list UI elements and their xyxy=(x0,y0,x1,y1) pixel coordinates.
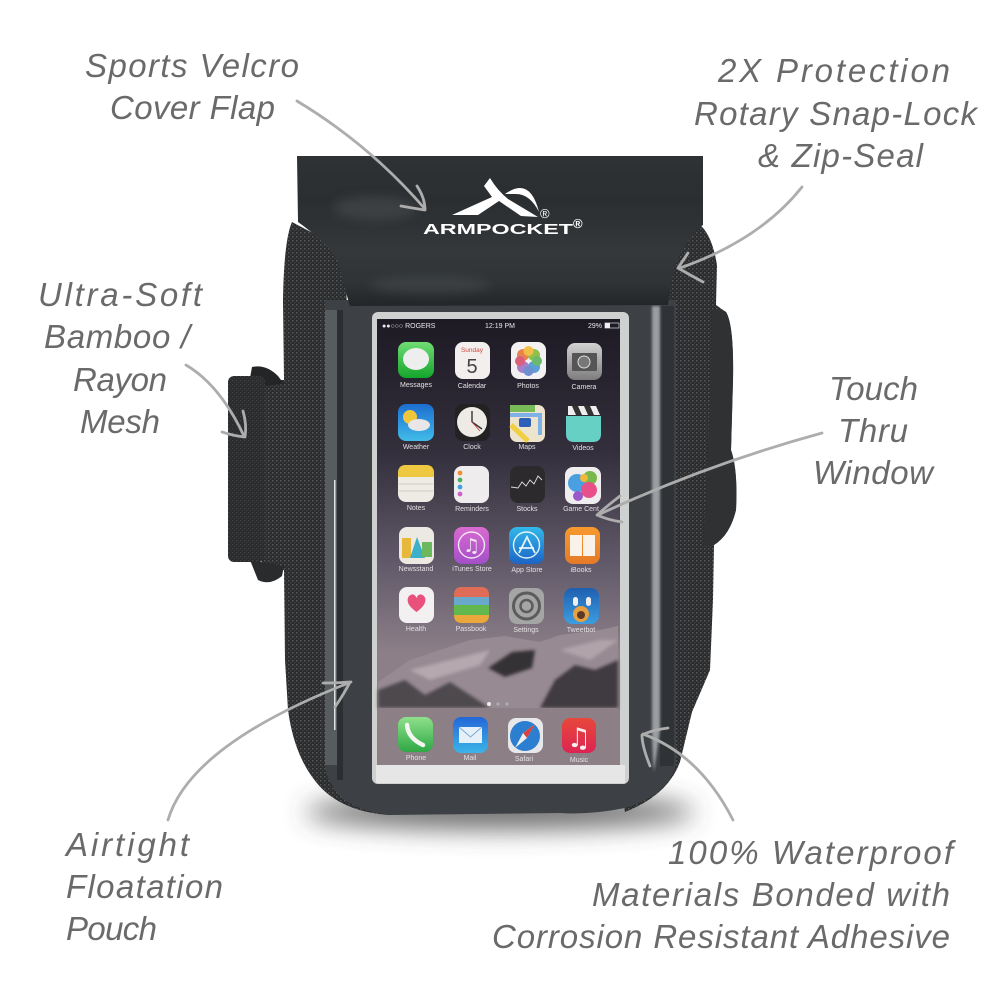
icon: Safari xyxy=(508,718,543,763)
icon: Photos: Photos xyxy=(517,383,539,390)
icon: Maps: Maps xyxy=(518,444,536,451)
icon: Newsstand xyxy=(399,527,434,573)
callout: 100% Waterproof Materials xyxy=(492,834,957,955)
right strap padded bump xyxy=(703,310,736,545)
callout: 2X Protection xyxy=(694,52,978,174)
arrow: velcro flap xyxy=(297,101,425,210)
icon: Reminders: Reminders xyxy=(455,506,489,513)
callout: Airtight Floatation Pouch: Airtight xyxy=(64,826,191,863)
icon: Music: ♫ xyxy=(567,723,591,754)
callout: 100% Waterproof Materials: 100% Waterproof xyxy=(668,834,957,871)
left mesh strap body xyxy=(262,222,390,815)
right side seam xyxy=(652,306,674,772)
icon: Messages: Messages xyxy=(400,382,432,389)
icon: Phone xyxy=(398,717,433,762)
callout: Ultra-Soft Bamboo / Rayon Mesh: Mesh xyxy=(80,403,160,440)
phone screen xyxy=(377,319,620,765)
callout: 2X Protection: 2X Protection xyxy=(717,52,950,89)
icon: Videos xyxy=(566,406,601,452)
callout: Touch Thru Window xyxy=(813,370,935,491)
icon: Mail: Mail xyxy=(464,755,477,762)
callout: Ultra-Soft Bamboo / Rayon Mesh: Ultra-Soft xyxy=(38,276,204,313)
icon: Newsstand: Newsstand xyxy=(399,566,433,573)
left arm strap with buckle xyxy=(228,366,284,582)
arrow: touch thru window xyxy=(597,433,822,522)
status bar: 29% xyxy=(588,323,602,330)
icon: Calendar xyxy=(455,342,490,390)
icon: Stocks xyxy=(510,466,545,513)
left side seam xyxy=(325,310,343,780)
phone window frame xyxy=(372,312,629,784)
arrow: bamboo mesh xyxy=(186,365,246,437)
callout: 100% Waterproof Materials: Corrosion Resistant Adhesive xyxy=(492,918,950,955)
flap highlights xyxy=(333,196,490,294)
callout: Ultra-Soft Bamboo / Rayon Mesh: Bamboo / xyxy=(44,318,193,355)
icon: Reminders xyxy=(454,466,489,513)
callout: Touch Thru Window: Touch xyxy=(829,370,918,407)
icon: iBooks: iBooks xyxy=(570,567,592,574)
icon: Phone: Phone xyxy=(406,755,426,762)
callout: Ultra-Soft Bamboo / Rayon Mesh: Rayon xyxy=(73,361,167,398)
icon: iTunes Store: iTunes Store xyxy=(452,566,492,573)
icon: Stocks: Stocks xyxy=(516,506,538,513)
icon: iBooks xyxy=(565,527,600,574)
icon: Health: Health xyxy=(406,626,426,633)
callout: 100% Waterproof Materials: Materials Bonded with xyxy=(592,876,950,913)
icon: Settings: Settings xyxy=(513,627,539,634)
icon: Camera xyxy=(567,343,602,391)
page dots xyxy=(487,702,509,706)
icon: iTunes Store xyxy=(452,527,492,573)
callout: 2X Protection: Rotary Snap-Lock xyxy=(694,95,978,132)
callout: Airtight Floatation Pouch: Pouch xyxy=(66,910,157,947)
icon: Calendar: Calendar xyxy=(458,383,487,390)
status bar: 12:19 PM xyxy=(485,323,515,330)
callout: Airtight Floatation Pouch: Floatation xyxy=(66,868,223,905)
icon: Messages xyxy=(398,342,434,389)
icon: iTunes Store: ♫ xyxy=(463,535,480,557)
callout: Airtight Floatation Pouch xyxy=(64,826,223,947)
icon: Health xyxy=(399,587,434,633)
icon: Tweetbot xyxy=(564,588,599,634)
arrow: floatation pouch xyxy=(168,682,351,820)
icon: Maps xyxy=(510,405,545,451)
icon: Music xyxy=(562,718,596,764)
icon: Passbook: Passbook xyxy=(456,626,487,633)
arrow: rotary snap-lock xyxy=(678,187,802,282)
icon: Music: Music xyxy=(570,757,589,764)
icon: Camera: Camera xyxy=(572,384,597,391)
icon: Safari: Safari xyxy=(515,756,534,763)
icon: Mail xyxy=(453,717,488,762)
ground shadow xyxy=(305,795,695,829)
icon: Notes xyxy=(398,465,434,512)
status bar xyxy=(382,323,619,330)
icon: Settings xyxy=(509,588,544,634)
callout: Touch Thru Window: Thru xyxy=(838,412,908,449)
icon: Calendar: Sunday xyxy=(461,347,484,354)
icon: Calendar: 5 xyxy=(466,356,478,378)
dock xyxy=(378,708,618,765)
icon: Videos: Videos xyxy=(572,445,594,452)
icon: App Store xyxy=(509,527,544,574)
icon: Weather: Weather xyxy=(403,444,430,451)
logo wordmark xyxy=(423,216,583,238)
callout: Sports Velcro Cover Flap: Sports Velcro xyxy=(85,47,299,84)
icon: Clock xyxy=(455,404,490,451)
icon: Photos xyxy=(511,342,546,390)
arrow: waterproof materials xyxy=(642,728,733,820)
logo wordmark: ® xyxy=(573,216,583,231)
callout: Touch Thru Window: Window xyxy=(813,454,935,491)
icon: Passbook xyxy=(454,587,489,633)
callout: Sports Velcro Cover Flap xyxy=(85,47,299,126)
callout: Sports Velcro Cover Flap: Cover Flap xyxy=(110,89,275,126)
wallpaper mountains xyxy=(378,626,618,708)
icon: Game Center xyxy=(563,467,601,513)
icon: Notes: Notes xyxy=(407,505,426,512)
logo mark: ® xyxy=(540,206,550,221)
cover flap xyxy=(297,156,703,306)
icon: Tweetbot: Tweetbot xyxy=(567,627,595,634)
icon: App Store: App Store xyxy=(511,567,543,574)
logo wordmark: ARMPOCKET xyxy=(423,222,573,238)
icon: Weather xyxy=(398,404,434,451)
icon: Game Center: Game Cent xyxy=(563,506,599,513)
callout: 2X Protection: & Zip-Seal xyxy=(758,137,925,174)
status bar: ●●○○○ ROGERS xyxy=(382,323,436,330)
right mesh strap body xyxy=(620,225,736,812)
logo mark xyxy=(452,178,550,221)
armband pouch product xyxy=(228,156,736,815)
icon: Clock: Clock xyxy=(463,444,481,451)
callout: Ultra-Soft Bamboo / Rayon Mesh xyxy=(38,276,204,440)
waterproof body xyxy=(325,300,676,815)
